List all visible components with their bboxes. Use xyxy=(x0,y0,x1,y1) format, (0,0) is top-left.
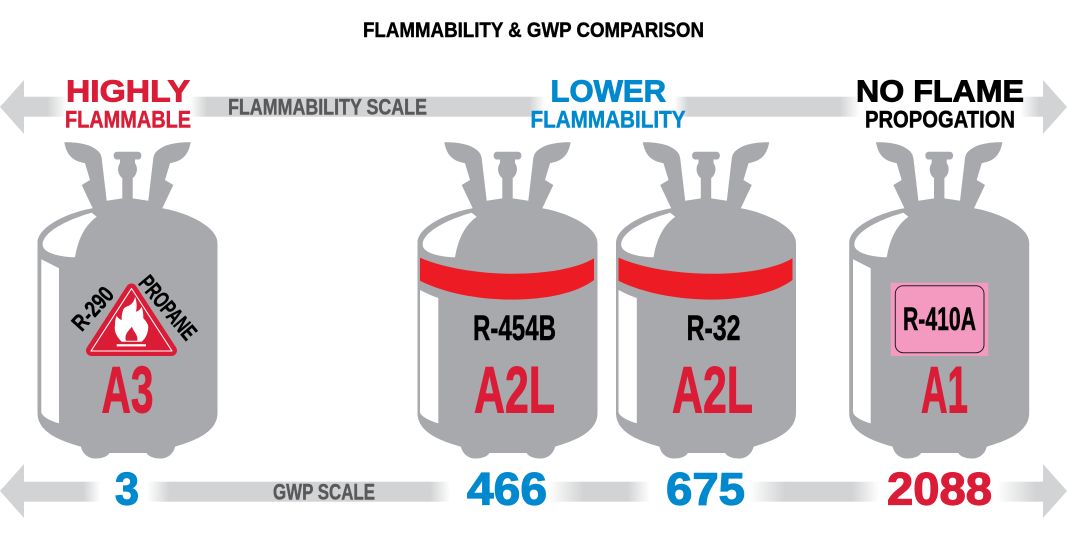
arrow: GWP scale xyxy=(0,464,1067,518)
tank: A3 R-290 propane xyxy=(38,142,218,458)
red band xyxy=(420,258,594,300)
label: R-290: R-290 xyxy=(66,281,119,336)
class: A2L: A2L xyxy=(474,352,555,426)
tank: A2L R-454B xyxy=(418,142,598,458)
class: A2L: A2L xyxy=(672,352,753,426)
red band xyxy=(618,258,792,300)
white side highlight xyxy=(420,290,438,423)
white dome highlight xyxy=(854,213,908,257)
GWP value: 466: 466 xyxy=(467,464,547,514)
white dome highlight xyxy=(423,213,477,257)
pink label xyxy=(891,283,988,356)
GWP value: 3: 3 xyxy=(115,464,139,514)
heading: highly flammable: FLAMMABLE xyxy=(65,106,191,134)
hazard triangle xyxy=(91,288,172,351)
heading: highly flammable: HIGHLY xyxy=(66,74,190,108)
white dome highlight xyxy=(43,213,97,257)
pink label: R-410A xyxy=(903,301,976,337)
tank silhouette xyxy=(849,142,1029,458)
white side highlight xyxy=(41,259,59,423)
GWP value: 675: 675 xyxy=(666,464,745,514)
arrow label: GWP scale: GWP SCALE xyxy=(273,480,375,504)
arrow label: flammability scale: FLAMMABILITY SCALE xyxy=(228,94,427,120)
heading: lower flammability xyxy=(530,74,686,134)
arrow: flammability scale xyxy=(0,80,1067,134)
heading: highly flammable xyxy=(65,74,191,134)
GWP value: 2088: 2088 xyxy=(887,464,992,514)
tank: A2L R-32 xyxy=(616,142,796,458)
class: A3: A3 xyxy=(102,352,154,426)
tank: A1 R-410A xyxy=(849,142,1029,458)
label: R-454B: R-454B xyxy=(473,309,556,348)
white side highlight xyxy=(618,290,637,423)
heading: lower flammability: FLAMMABILITY xyxy=(530,106,686,134)
icon: flame xyxy=(115,297,148,342)
heading: no flame propogation: NO FLAME xyxy=(856,74,1024,108)
flame inner xyxy=(125,327,137,341)
heading: lower flammability: LOWER xyxy=(550,74,666,108)
class: A1: A1 xyxy=(921,352,968,426)
label: R-32: R-32 xyxy=(686,309,740,348)
heading: no flame propogation: PROPOGATION xyxy=(865,106,1015,134)
white dome highlight xyxy=(621,213,675,257)
tank silhouette xyxy=(616,142,796,458)
title: FLAMMABILITY & GWP COMPARISON xyxy=(363,18,704,42)
tank silhouette xyxy=(38,142,218,458)
label: propane: PROPANE xyxy=(134,270,202,345)
heading: no flame propogation xyxy=(856,74,1024,134)
tank silhouette xyxy=(418,142,598,458)
white side highlight xyxy=(853,259,871,423)
